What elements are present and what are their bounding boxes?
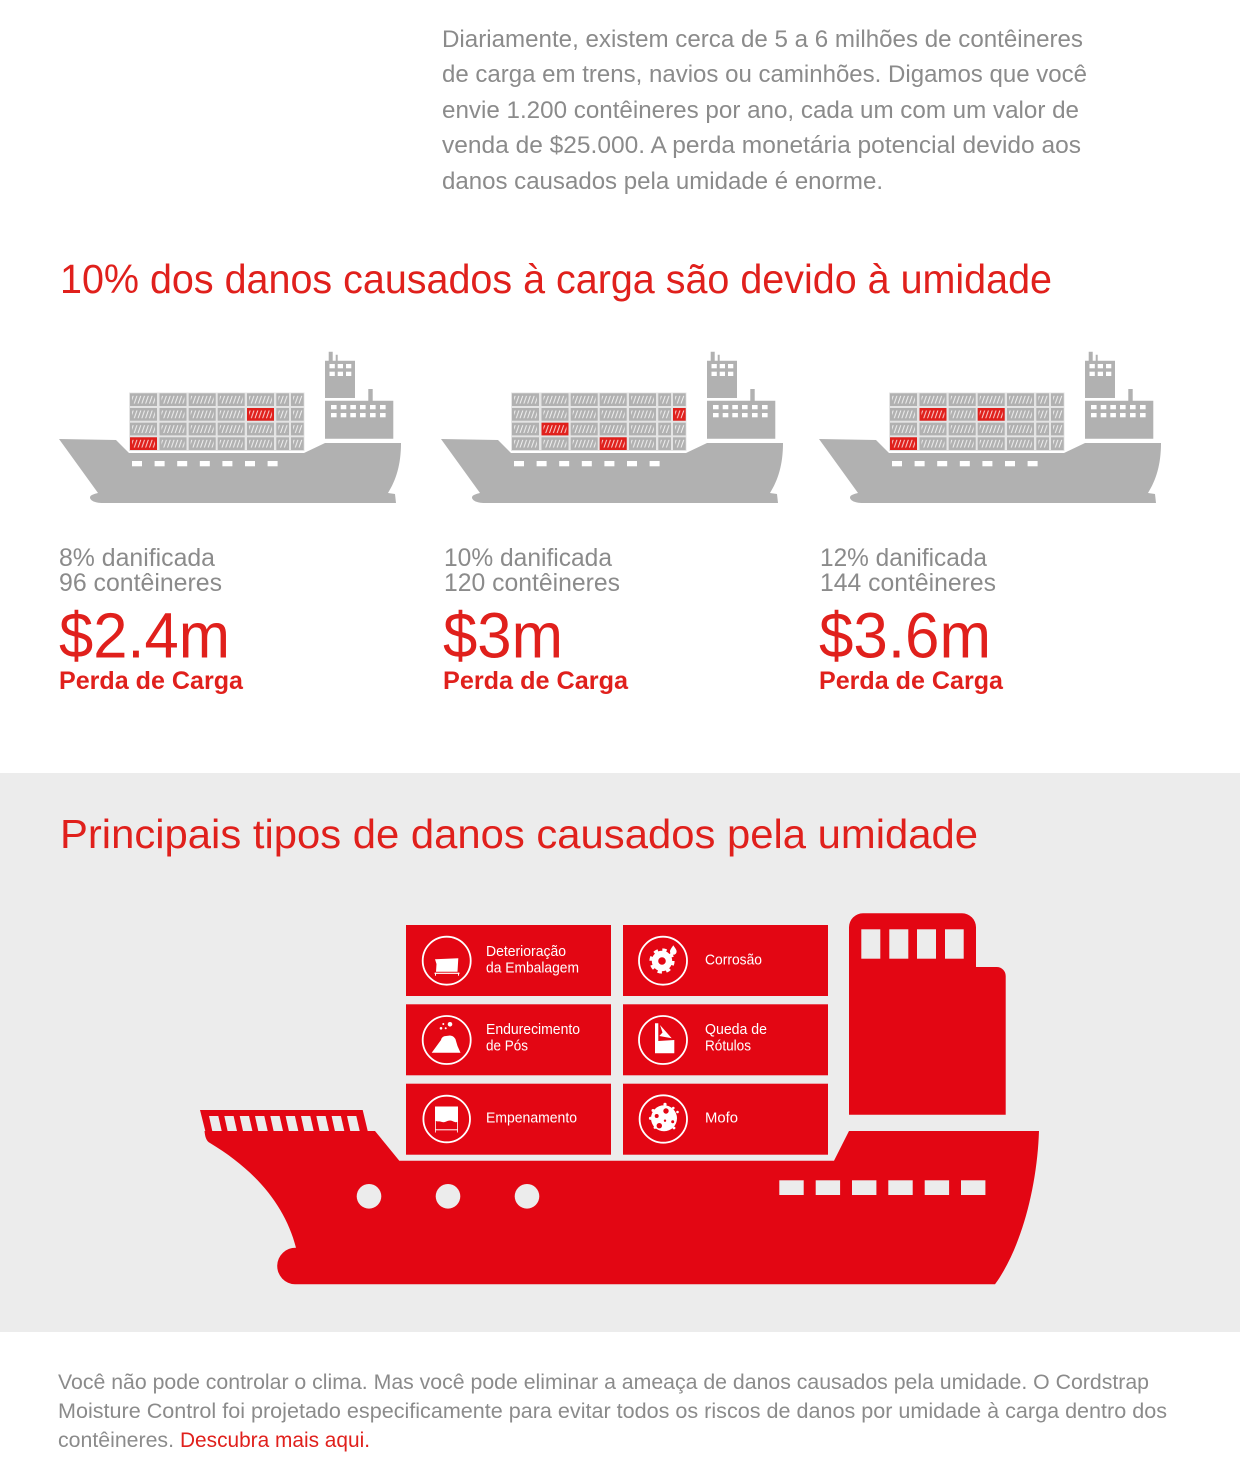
intro paragraph: de carga em trens, navios ou caminhões. Digamos que você — [442, 61, 1087, 88]
box: packaging deterioration: da Embalagem — [486, 961, 579, 977]
stat: 12%: Perda de Carga — [819, 667, 1004, 695]
stat: 12%: 144 contêineres — [820, 569, 996, 597]
panel: damage types background — [0, 773, 1240, 1332]
footer text: Você não pode controlar o clima. Mas você pode eliminar a ameaça de danos causados pela umidade. O Cordstrap — [58, 1371, 1149, 1394]
intro paragraph: Diariamente, existem cerca de 5 a 6 milhões de contêineres — [442, 26, 1083, 53]
large red ship — [200, 913, 1039, 1284]
stat: 10%: $3m — [443, 600, 563, 672]
intro paragraph: envie 1.200 contêineres por ano, cada um com um valor de — [442, 97, 1079, 124]
stat: 8%: 96 contêineres — [59, 569, 222, 597]
box: corrosion — [623, 925, 828, 996]
icon: mold spore — [649, 1103, 679, 1131]
superstructure — [849, 913, 1006, 1115]
stat: 10%: 120 contêineres — [444, 569, 620, 597]
icon: powder heap — [432, 1022, 460, 1053]
stat: 8%: Perda de Carga — [59, 667, 244, 695]
stat: 12%: 12% danificada — [820, 544, 987, 572]
box: label drop: Queda de — [705, 1022, 767, 1038]
intro paragraph: venda de $25.000. A perda monetária potencial devido aos — [442, 132, 1081, 159]
box: powder hardening — [406, 1004, 611, 1075]
heading: 10% of cargo damage: 10% dos danos causados à carga são devido à umidade — [60, 256, 1052, 302]
stat: 12%: $3.6m — [819, 600, 991, 672]
stat: 12% — [819, 544, 1004, 695]
stat: 8%: 8% danificada — [59, 544, 215, 572]
box: warping — [406, 1084, 611, 1155]
icon: deteriorated box — [434, 958, 460, 976]
box: mold: Mofo — [705, 1111, 738, 1127]
stat: 10% — [443, 544, 629, 695]
stat: 8%: $2.4m — [59, 600, 230, 672]
footer text: Moisture Control foi projetado especificamente para evitar todos os riscos de danos por umidade à carga dentro dos — [58, 1400, 1167, 1423]
ship 3: 12% damaged — [819, 352, 1161, 503]
icon: warped box — [435, 1106, 458, 1132]
footer text: contêineres. — [58, 1429, 174, 1452]
box: powder hardening: de Pós — [486, 1039, 528, 1055]
box: corrosion: Corrosão — [705, 953, 762, 969]
intro paragraph: danos causados pela umidade é enorme. — [442, 168, 883, 195]
stat: 8% — [59, 544, 244, 695]
box: mold — [623, 1084, 828, 1155]
ship 2: 10% damaged — [441, 352, 783, 503]
stat: 10%: Perda de Carga — [443, 667, 629, 695]
footer text: Descubra mais aqui. — [180, 1429, 370, 1452]
icon: gear with drop — [651, 945, 677, 972]
box: powder hardening: Endurecimento — [486, 1022, 580, 1038]
box: warping: Empenamento — [486, 1111, 577, 1127]
footer text — [58, 1371, 1167, 1452]
intro paragraph — [442, 26, 1087, 195]
heading: main damage types: Principais tipos de danos causados pela umidade — [60, 811, 978, 857]
box: label drop — [623, 1004, 828, 1075]
rail slots — [209, 1116, 985, 1209]
box: packaging deterioration — [406, 925, 611, 996]
box: packaging deterioration: Deterioração — [486, 944, 566, 960]
stat: 10%: 10% danificada — [444, 544, 612, 572]
icon: peeling label — [655, 1023, 674, 1053]
ship 1: 8% damaged — [59, 352, 401, 503]
box: label drop: Rótulos — [705, 1039, 751, 1055]
